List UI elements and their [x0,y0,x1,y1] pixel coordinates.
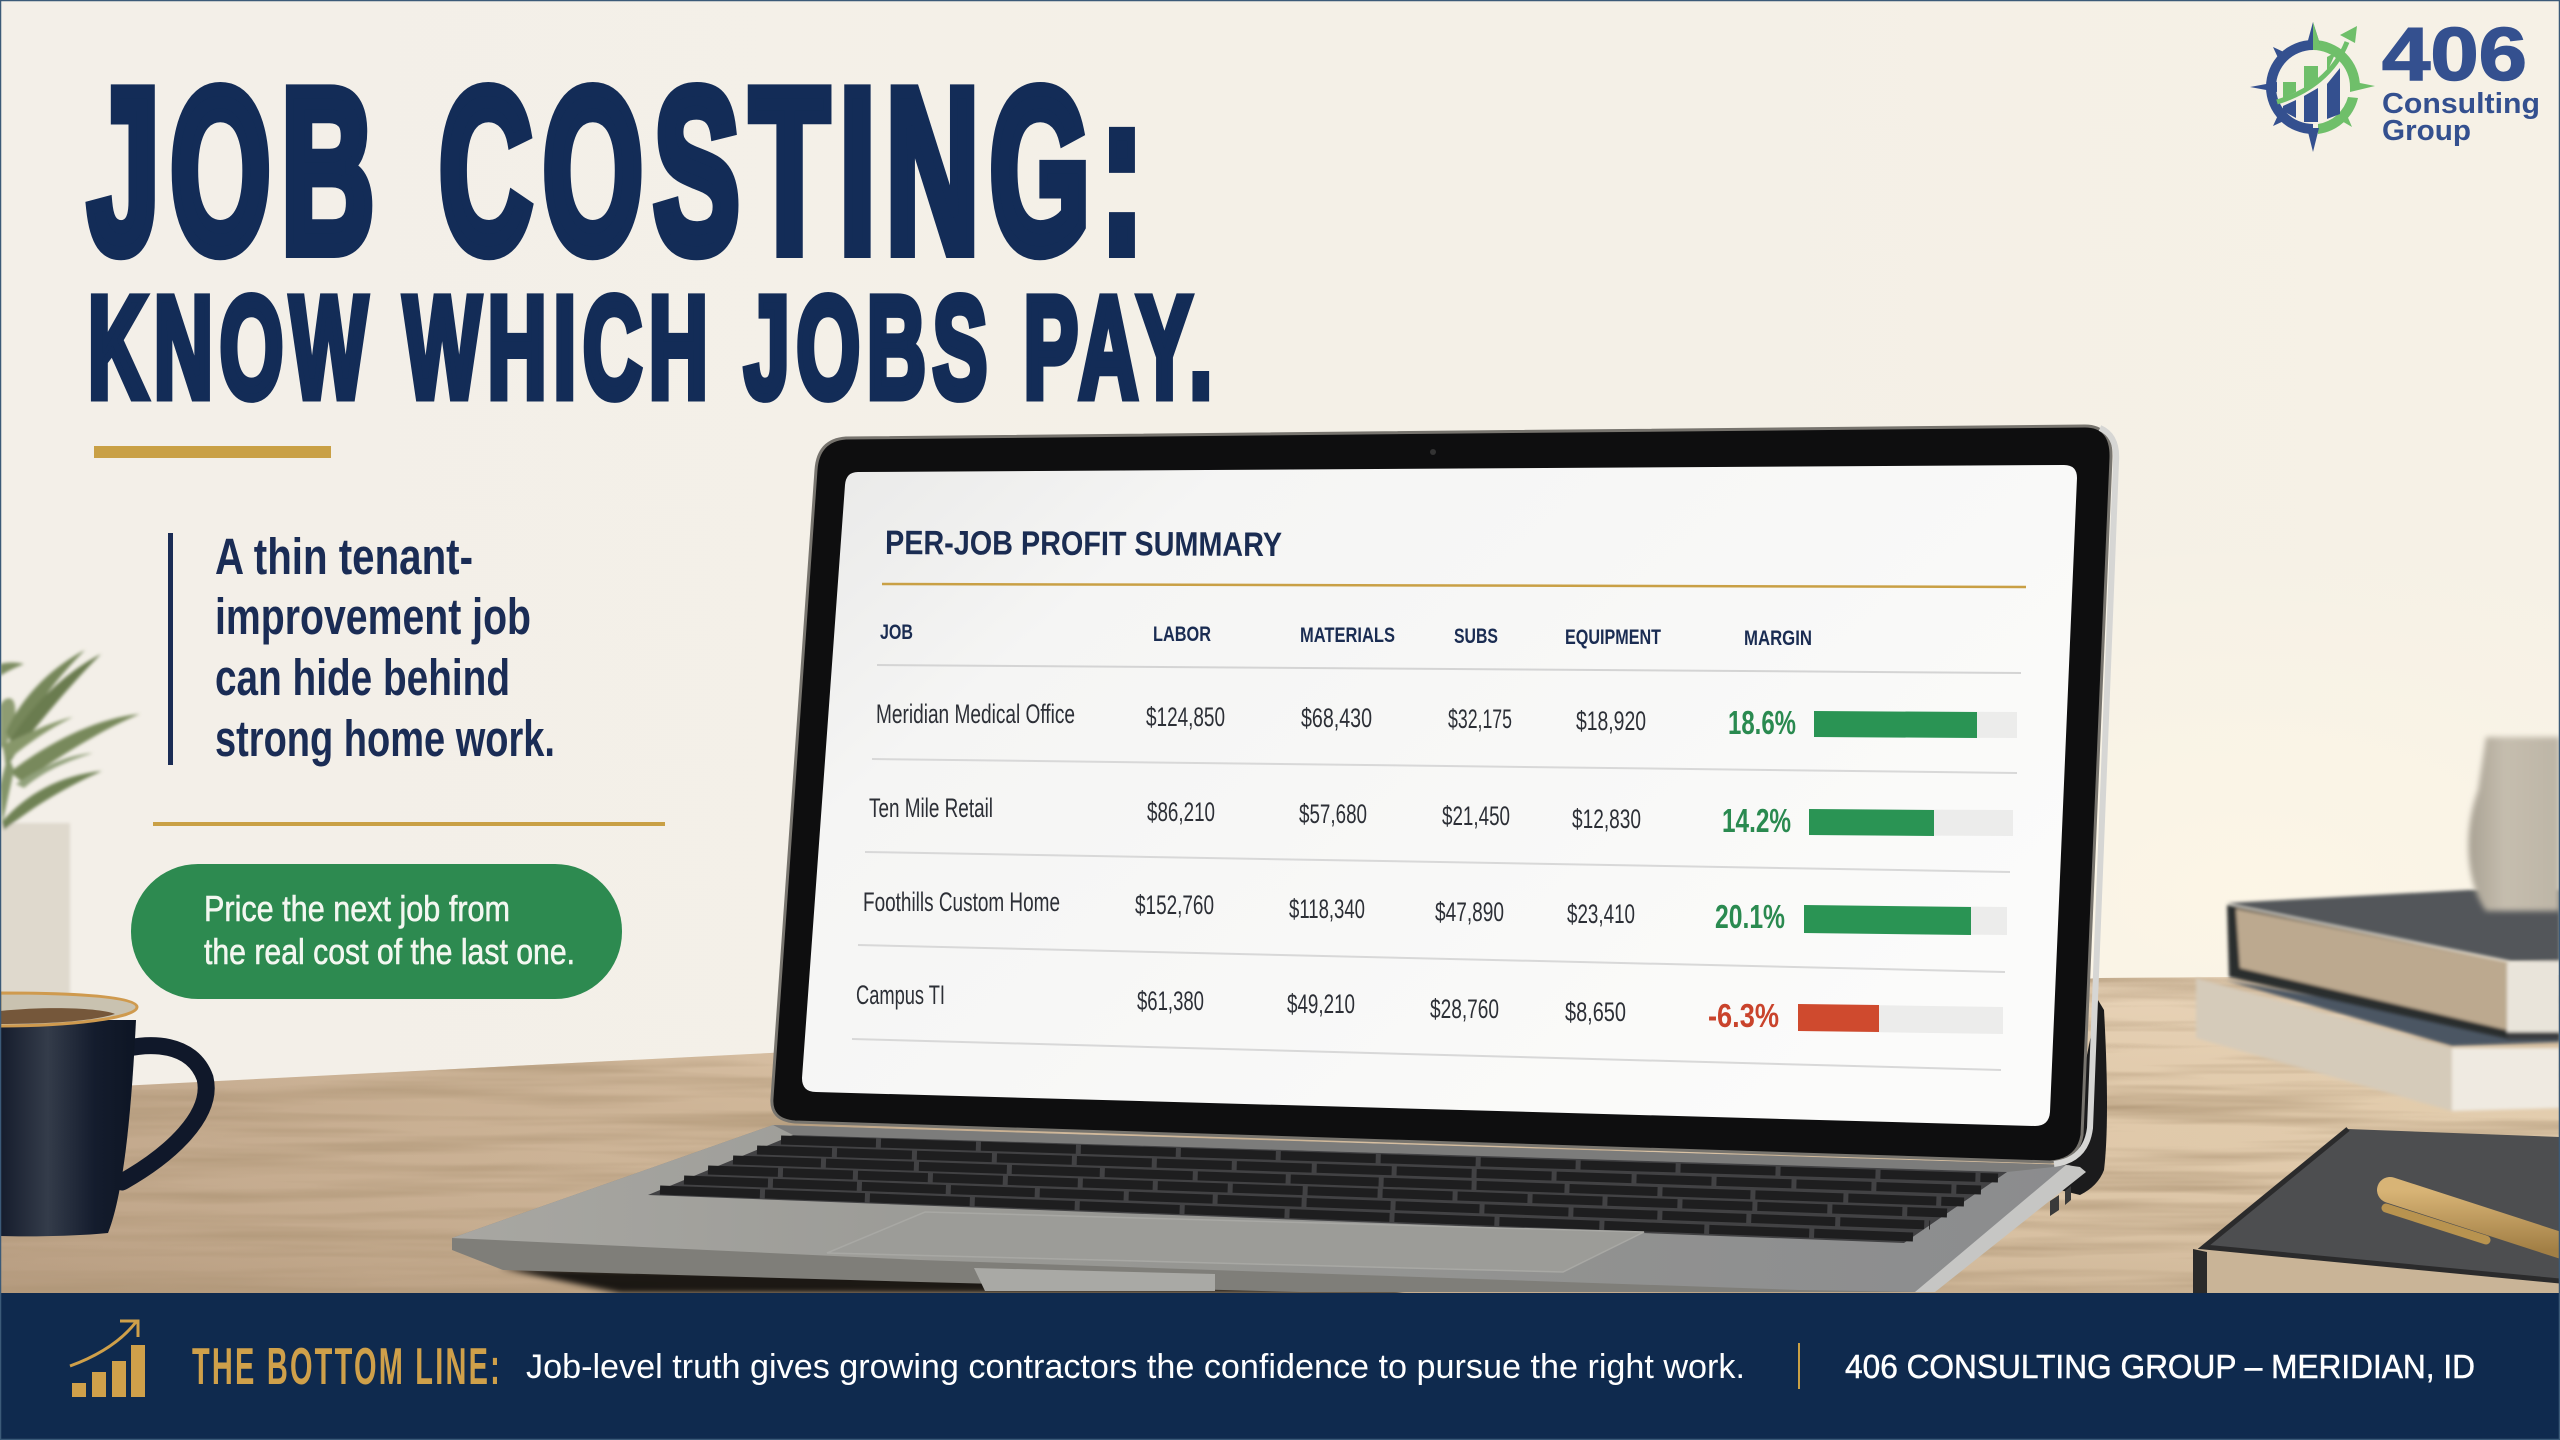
row: Ten Mile Retail: $12,830 [1572,804,1641,834]
table header row: JOB [880,621,913,644]
table header row: MATERIALS [1300,624,1395,647]
gold accent rule [94,446,331,458]
row: Campus TI: Campus TI [856,980,945,1010]
row: Meridian Medical Office: $124,850 [1146,702,1225,732]
green pill callout [131,864,622,999]
row: Campus TI: $8,650 [1565,997,1626,1027]
icon: rising bar chart [70,1321,145,1397]
keyboard [648,1135,2007,1243]
table header row: SUBS [1454,625,1498,648]
title [88,42,1219,428]
laptop base [452,1125,2086,1292]
title: KNOW WHICH JOBS PAY. [88,267,1219,428]
lid silver edge [2054,428,2116,1164]
row: Foothills Custom Home [863,887,2007,935]
bottom banner: THE BOTTOM LINE: [192,1338,502,1396]
icon: compass with chart [2250,22,2375,152]
table title: PER-JOB PROFIT SUMMARY [885,524,1282,564]
trackpad [827,1212,1644,1272]
laptop shadow [500,1268,1400,1293]
logo: 406 Consulting Group [2250,12,2540,152]
row: Meridian Medical Office: 18.6% [1728,704,1796,741]
table header row: EQUIPMENT [1565,626,1661,649]
row: Ten Mile Retail: Ten Mile Retail [869,793,993,823]
hinge stand [2060,1000,2107,1195]
green pill callout: Price the next job from [204,888,510,929]
row: Campus TI: -6.3% [1708,997,1779,1034]
row: Meridian Medical Office: $68,430 [1301,703,1372,733]
row: Ten Mile Retail [869,793,2013,839]
green pill callout: the real cost of the last one. [204,931,575,972]
bottom banner: Job-level truth gives growing contractors the confidence to pursue the right work. [526,1348,1745,1386]
usb ports [2050,1186,2071,1216]
logo: 406 Consulting Group: 406 [2382,12,2527,96]
row: Foothills Custom Home: 20.1% [1715,898,1785,935]
table header row [880,621,1812,650]
table header row: MARGIN [1744,627,1812,650]
row: Campus TI: $28,760 [1430,994,1499,1024]
row: Ten Mile Retail: $57,680 [1299,799,1367,829]
row: Foothills Custom Home: Foothills Custom Home [863,887,1060,917]
vase [2468,737,2560,911]
row: Meridian Medical Office: $32,175 [1448,704,1512,734]
laptop [452,426,2116,1293]
background: wall and desk [1,975,2559,1293]
laptop screen: per-job profit summary [802,465,2077,1126]
row: Campus TI: $49,210 [1287,989,1355,1019]
row: Foothills Custom Home: $23,410 [1567,899,1635,929]
callout: thin job statement: A thin tenant- [215,528,473,585]
row: Meridian Medical Office: $18,920 [1576,706,1646,736]
gold divider [153,822,665,826]
logo: 406 Consulting Group: Consulting [2382,88,2540,120]
row: Campus TI [856,980,2003,1034]
row: Foothills Custom Home: $152,760 [1135,890,1214,920]
bottom banner: 406 CONSULTING GROUP – MERIDIAN, ID [1845,1348,2475,1385]
table header row: LABOR [1153,623,1211,646]
row: Foothills Custom Home: $47,890 [1435,897,1504,927]
row: Foothills Custom Home: $118,340 [1289,894,1365,924]
callout: thin job statement: can hide behind [215,649,510,706]
logo: 406 Consulting Group: Group [2382,115,2471,147]
lid and bezel [772,426,2111,1162]
callout: thin job statement [168,528,555,767]
row: Campus TI: $61,380 [1137,986,1204,1016]
callout: thin job statement: strong home work. [215,710,555,767]
coffee mug [0,993,206,1236]
callout: thin job statement: improvement job [215,588,531,645]
row: Ten Mile Retail: $21,450 [1442,801,1510,831]
row: Meridian Medical Office [876,699,2017,741]
notebook and gold pen [2193,1129,2560,1293]
plant in stone pot [0,650,140,1013]
stacked books [2196,890,2560,1111]
title: JOB COSTING: [88,42,1154,301]
row: Meridian Medical Office: Meridian Medical Office [876,699,1075,729]
row: Ten Mile Retail: 14.2% [1722,802,1791,839]
row: Ten Mile Retail: $86,210 [1147,797,1215,827]
bottom banner [0,1293,2560,1440]
